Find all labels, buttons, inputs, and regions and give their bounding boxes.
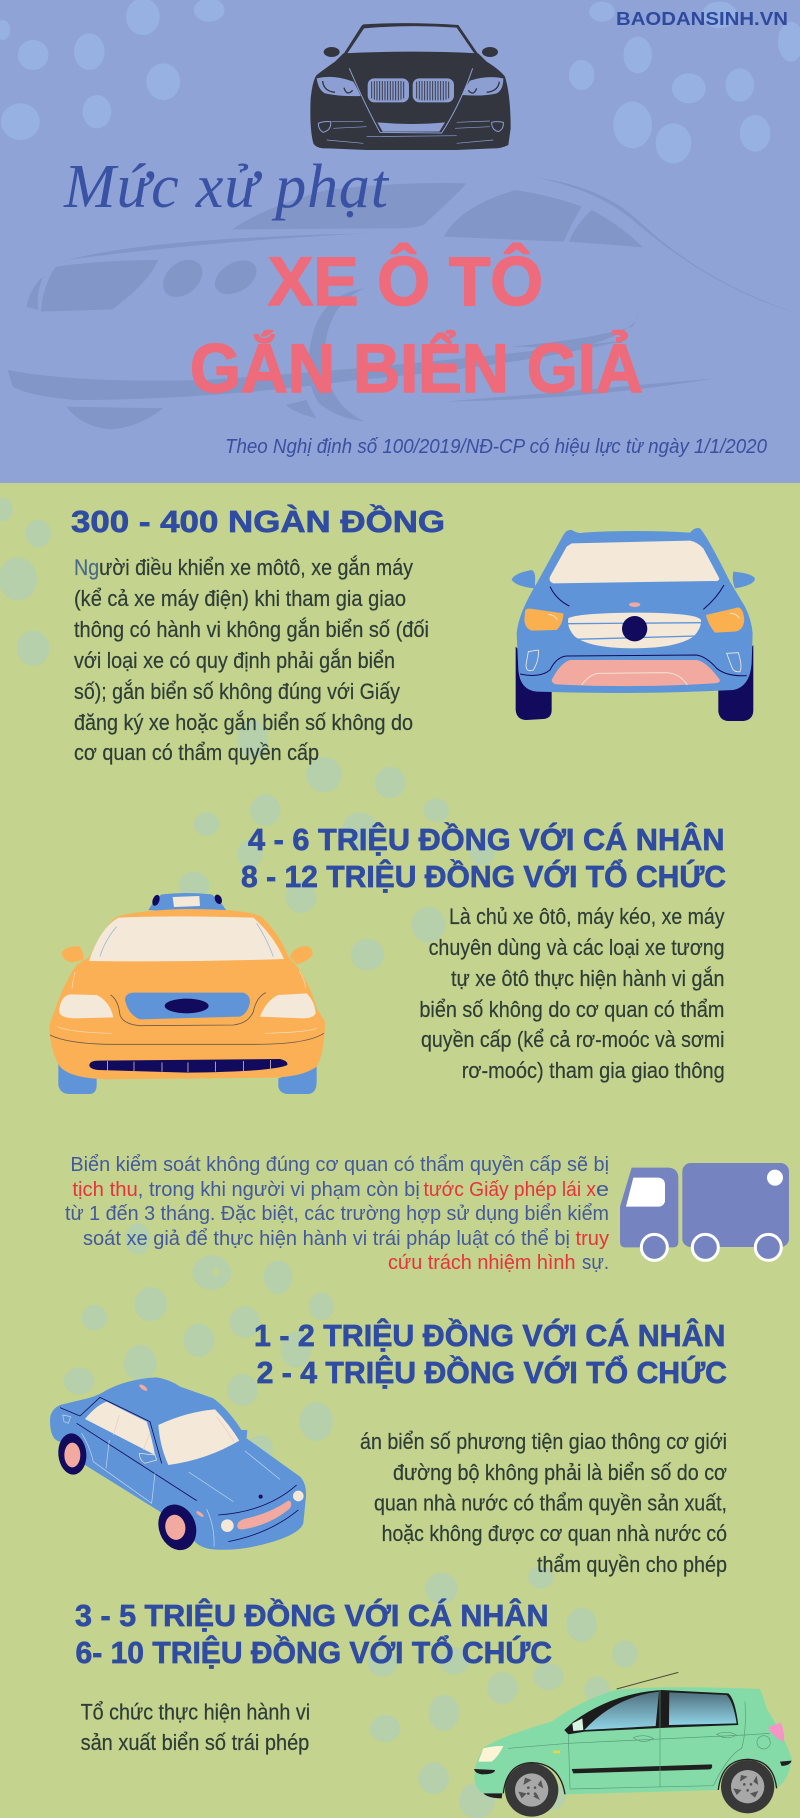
paragraph — [360, 1429, 727, 1577]
callout text: cứu trách nhiệm hình — [388, 1251, 576, 1274]
paragraph: tự xe ôtô thực hiện hành vi gắn — [451, 966, 724, 991]
title: XE Ô TÔ: XE Ô TÔ — [268, 243, 543, 320]
ghost car silhouette — [8, 177, 800, 429]
subtitle: legal basis: Theo Nghị định số 100/2019/NĐ-CP có hiệu lực từ ngày 1/1/2020 — [225, 436, 767, 458]
section 4: 3 - 5 million — [75, 1597, 792, 1817]
paragraph: số); gắn biển số không đúng với Giấy — [74, 679, 400, 704]
paragraph: quyền cấp (kể cả rơ-moóc và sơmi — [421, 1027, 724, 1052]
paragraph: hoặc không được cơ quan nhà nước có — [382, 1521, 727, 1546]
callout text: tước Giấy phép lái x — [424, 1178, 597, 1201]
icon: dark front-view car — [310, 23, 511, 150]
paragraph — [419, 904, 725, 1083]
paragraph: chuyên dùng và các loại xe tương — [429, 935, 725, 960]
icon: truck — [620, 1163, 789, 1260]
heading — [75, 1597, 552, 1670]
icon: green hatchback — [474, 1672, 792, 1817]
paragraph: án biển số phương tiện giao thông cơ giới — [360, 1429, 727, 1454]
callout: consequences — [65, 1153, 789, 1274]
section 3: 1 - 2 million — [50, 1317, 727, 1577]
callout text: từ 1 đến 3 tháng. Đặc biệt, các trường hợp sử dụng biển kiểm — [65, 1202, 609, 1225]
paragraph: với loại xe có quy định phải gắn biển — [74, 648, 395, 673]
heading — [254, 1317, 727, 1390]
paragraph: (kể cả xe máy điện) khi tham gia giao — [74, 586, 406, 611]
title script line: Mức xử phạt — [63, 153, 390, 221]
icon: blue sedan — [50, 1377, 306, 1556]
paragraph: cơ quan có thẩm quyền cấp — [74, 740, 319, 765]
icon: yellow taxi — [49, 893, 325, 1094]
paragraph: đăng ký xe hoặc gắn biển số không do — [74, 710, 413, 735]
heading: 8 - 12 TRIỆU ĐỒNG VỚI TỔ CHỨC — [241, 858, 726, 894]
heading: 2 - 4 TRIỆU ĐỒNG VỚI TỔ CHỨC — [257, 1354, 727, 1390]
paragraph: Tổ chức thực hiện hành vi — [81, 1700, 310, 1724]
heading: 3 - 5 TRIỆU ĐỒNG VỚI CÁ NHÂN — [75, 1597, 548, 1633]
heading: 300 - 400 NGÀN ĐỒNG — [71, 503, 445, 539]
heading: 4 - 6 TRIỆU ĐỒNG VỚI CÁ NHÂN — [248, 821, 724, 857]
callout text: truy — [576, 1227, 610, 1250]
paragraph: biển số không do cơ quan có thẩm — [419, 997, 724, 1022]
callout text: Biển kiểm soát không đúng cơ quan có thẩm quyền cấp sẽ bị — [70, 1153, 609, 1176]
callout text: tịch thu — [72, 1178, 138, 1201]
site name: BAODANSINH.VN — [616, 9, 788, 29]
panel: content background — [0, 483, 800, 1818]
paragraph — [81, 1700, 310, 1755]
panel: header — [0, 0, 800, 483]
paragraph: thông có hành vi không gắn biển số (đối — [74, 617, 429, 642]
heading: 6- 10 TRIỆU ĐỒNG VỚI TỔ CHỨC — [76, 1634, 552, 1670]
paragraph: Là chủ xe ôtô, máy kéo, xe máy — [449, 904, 724, 929]
callout text: soát xe giả để thực hiện hành vi trái pháp luật có thể bị — [83, 1227, 570, 1250]
callout text: e — [596, 1178, 609, 1201]
paragraph: thẩm quyền cho phép — [537, 1552, 727, 1577]
paragraph: đường bộ không phải là biển số do cơ — [393, 1460, 727, 1485]
paragraph — [74, 555, 429, 765]
section 2: 4 - 6 million — [49, 821, 726, 1094]
heading: 1 - 2 TRIỆU ĐỒNG VỚI CÁ NHÂN — [254, 1317, 726, 1353]
callout text — [65, 1153, 610, 1274]
paragraph: Người điều khiển xe môtô, xe gắn máy — [74, 555, 413, 580]
paragraph: rơ-moóc) tham gia giao thông — [462, 1058, 725, 1083]
section 1: 300 - 400 thousand — [71, 503, 755, 765]
title: GẮN BIỂN GIẢ: GẮN BIỂN GIẢ — [190, 330, 643, 407]
callout text: , trong khi người vi phạm còn bị — [138, 1178, 420, 1201]
callout text: sự. — [582, 1251, 609, 1274]
icon: blue front-view car — [512, 528, 755, 721]
paragraph: sản xuất biển số trái phép — [81, 1730, 309, 1755]
heading — [241, 821, 726, 894]
paragraph: quan nhà nước có thẩm quyền sản xuất, — [374, 1490, 727, 1516]
